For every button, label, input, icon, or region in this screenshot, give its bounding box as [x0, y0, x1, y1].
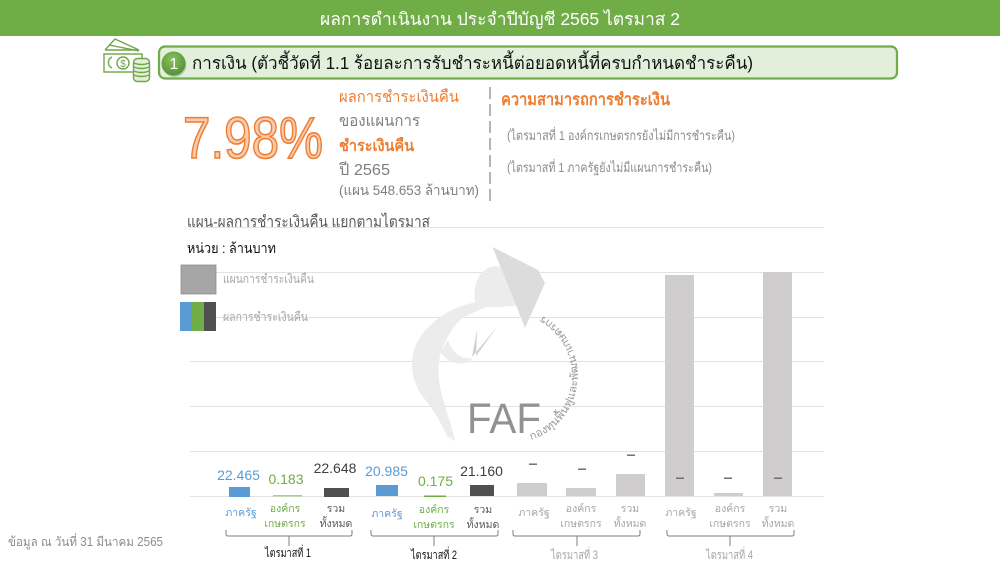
quarter 1 bars: 22.648: [314, 460, 357, 476]
result description: (แผน 548.653 ล้านบาท): [339, 182, 479, 198]
category labels: เกษตรกร: [264, 518, 306, 530]
category labels: ทั้งหมด: [467, 517, 499, 531]
repayment capacity block: (ไตรมาสที่ 1 ภาครัฐยังไม่มีแผนการชำระคืน): [507, 159, 712, 176]
quarter 4 bars: [665, 272, 792, 496]
category labels: องค์กร: [419, 503, 450, 516]
quarter labels: ไตรมาสที่ 3: [550, 546, 598, 562]
header title: ผลการดำเนินงาน ประจำปีบัญชี 2565 ไตรมาส 2: [320, 9, 680, 29]
result description: ปี 2565: [339, 161, 390, 179]
section heading bar: [159, 46, 897, 78]
watermark logo: [412, 247, 578, 443]
category labels: [225, 502, 794, 531]
category labels: ทั้งหมด: [320, 516, 352, 530]
chart title: แผน-ผลการชำระเงินคืน แยกตามไตรมาส: [187, 212, 430, 231]
quarter 2 bars: 21.160: [460, 463, 503, 479]
quarter labels: ไตรมาสที่ 1: [264, 544, 311, 560]
quarter 2 bars: 0.175: [418, 473, 453, 489]
legend: plan: แผนการชำระเงินคืน: [223, 272, 314, 286]
category labels: เกษตรกร: [413, 519, 455, 531]
category labels: ทั้งหมด: [762, 516, 794, 530]
bar chart: [217, 272, 792, 497]
repayment capacity block: ความสามารถการชำระเงิน: [501, 90, 671, 109]
data date note: ข้อมูล ณ วันที่ 31 มีนาคม 2565: [8, 533, 163, 550]
legend: [180, 265, 314, 331]
number badge: 1: [170, 56, 179, 73]
category labels: องค์กร: [715, 502, 746, 515]
category labels: ภาครัฐ: [371, 508, 403, 520]
grid lines: [190, 228, 824, 496]
watermark logo: กองทุนฟื้นฟูและพัฒนาเกษตรกร: [530, 316, 578, 440]
quarter 2 bars: [365, 463, 503, 497]
category labels: ทั้งหมด: [614, 516, 646, 530]
quarter 1 bars: 0.183: [268, 471, 304, 487]
result description: [339, 88, 479, 198]
header bar: [0, 0, 1000, 36]
watermark logo: FAF: [467, 395, 541, 443]
quarter labels: ไตรมาสที่ 2: [410, 546, 457, 562]
dashed divider: [489, 87, 491, 201]
repayment capacity block: [501, 90, 735, 176]
category labels: เกษตรกร: [560, 518, 602, 530]
section heading text: การเงิน (ตัวชี้วัดที่ 1.1 ร้อยละการรับชำระหนี้ต่อยอดหนี้ที่ครบกำหนดชำระคืน): [192, 50, 753, 73]
category labels: องค์กร: [270, 502, 301, 515]
result description: ผลการชำระเงินคืน: [339, 88, 459, 106]
quarter labels: [264, 544, 753, 562]
category labels: รวม: [474, 504, 492, 516]
quarter 1 bars: 22.465: [217, 467, 260, 483]
category labels: ภาครัฐ: [665, 507, 697, 519]
quarter brackets: [226, 530, 794, 546]
result description: ของแผนการ: [339, 113, 420, 130]
quarter 2 bars: 20.985: [365, 463, 408, 479]
quarter labels: ไตรมาสที่ 4: [705, 546, 753, 562]
category labels: รวม: [621, 503, 639, 515]
unit label: หน่วย : ล้านบาท: [187, 240, 276, 256]
repayment capacity block: (ไตรมาสที่ 1 องค์กรเกษตรกรยังไม่มีการชำระคืน): [507, 127, 735, 143]
category labels: ภาครัฐ: [225, 507, 257, 519]
category labels: ภาครัฐ: [518, 507, 550, 519]
legend: result: ผลการชำระเงินคืน: [223, 310, 308, 324]
big percentage: 7.98%: [183, 106, 323, 171]
category labels: รวม: [769, 503, 787, 515]
result description: ชำระเงินคืน: [339, 137, 414, 155]
category labels: รวม: [327, 503, 345, 515]
number badge: [162, 52, 186, 77]
quarter 3 bars: [517, 454, 645, 496]
icon: money and coins: $: [120, 59, 126, 70]
category labels: องค์กร: [566, 502, 597, 515]
quarter 1 bars: [217, 460, 357, 497]
icon: money and coins: [104, 39, 150, 82]
category labels: เกษตรกร: [709, 518, 751, 530]
